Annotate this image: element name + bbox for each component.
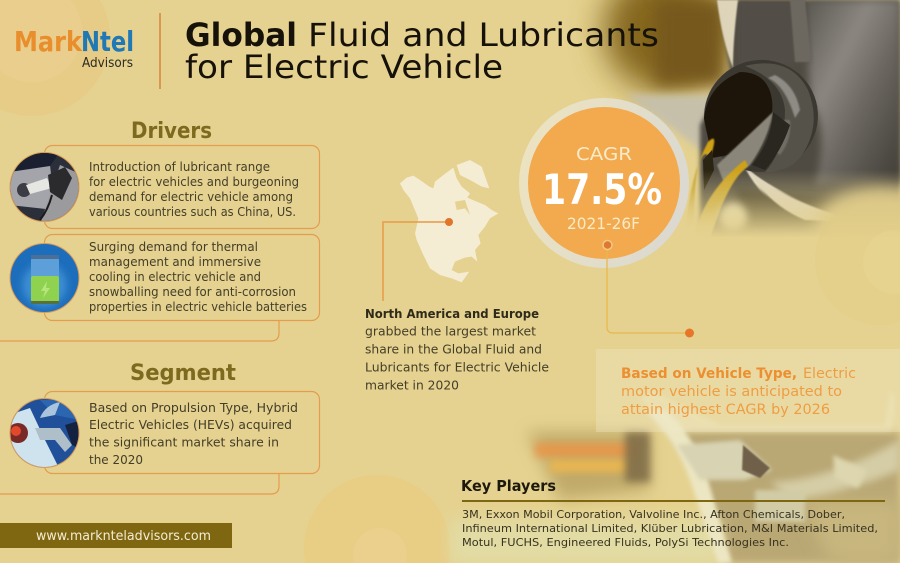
driver 2 text: properties in electric vehicle batteries <box>89 299 307 314</box>
driver 1 text: for electric vehicles and burgeoning <box>89 174 299 189</box>
key players: Key Players <box>461 477 556 495</box>
CAGR badge: CAGR <box>576 144 632 165</box>
website banner: www.marknteladvisors.com <box>36 529 211 544</box>
connector: CAGR to vehicle type callout <box>603 240 694 338</box>
connector: map to North America text <box>383 218 453 301</box>
oil streams <box>686 139 748 238</box>
callout: vehicle type text: attain highest CAGR by 2026 <box>621 402 830 418</box>
title: Fluid and Lubricants <box>308 16 659 54</box>
segment text: Based on Propulsion Type, Hybrid <box>89 401 298 416</box>
logo: Ntel <box>81 25 134 58</box>
North America text <box>365 307 549 394</box>
North America text: market in 2020 <box>365 378 459 394</box>
logo divider <box>159 13 161 89</box>
heading: Segment: Segment <box>130 361 236 386</box>
callout: vehicle type text <box>621 366 856 418</box>
CAGR badge <box>519 98 689 268</box>
callout: vehicle type text: motor vehicle is anticipated to <box>621 384 842 400</box>
logo: Advisors <box>82 55 133 71</box>
driver 1 text: demand for electric vehicle among <box>89 189 293 204</box>
icon: hybrid vehicle photo <box>8 398 82 470</box>
panel: vehicle type callout background <box>596 349 900 432</box>
website banner <box>0 523 232 548</box>
bottle mouth <box>704 60 818 180</box>
driver 1 text <box>89 159 299 219</box>
callout: vehicle type text: Electric <box>803 366 856 382</box>
key players: 3M, Exxon Mobil Corporation, Valvoline Inc., Afton Chemicals, Dober, <box>462 508 845 521</box>
key players <box>461 477 885 549</box>
heading: Drivers: Drivers <box>131 119 212 144</box>
title: for Electric Vehicle <box>185 48 503 86</box>
key players: Motul, FUCHS, Engineered Fluids, PolySi Technologies Inc. <box>462 536 789 549</box>
North America text: Lubricants for Electric Vehicle <box>365 360 549 376</box>
map: North America <box>400 160 498 282</box>
segment text: the 2020 <box>89 453 143 468</box>
North America text: share in the Global Fluid and <box>365 342 542 358</box>
CAGR badge: 17.5% <box>542 165 662 214</box>
segment text <box>89 401 298 468</box>
driver 2 text: cooling in electric vehicle and <box>89 269 261 284</box>
photo: blurred EV charger <box>450 410 900 563</box>
icon: battery <box>8 242 80 314</box>
photo: oil bottle pouring <box>603 0 900 263</box>
driver 2 text: management and immersive <box>89 254 261 269</box>
title <box>185 16 659 86</box>
callout: vehicle type text: Based on Vehicle Type, <box>621 366 797 382</box>
North America text: North America and Europe <box>365 307 539 322</box>
driver 1 text: Introduction of lubricant range <box>89 159 270 174</box>
key players: Infineum International Limited, Klüber Lubrication, M&I Materials Limited, <box>462 522 878 535</box>
title: Global <box>185 16 297 54</box>
driver 1 text: various countries such as China, US. <box>89 204 296 219</box>
segment text: the significant market share in <box>89 436 279 450</box>
panel: driver 2 <box>0 234 320 341</box>
North America text: grabbed the largest market <box>365 324 536 340</box>
driver 2 text <box>89 239 307 314</box>
driver 2 text: snowballing need for anti-corrosion <box>89 284 296 299</box>
segment text: Electric Vehicles (HEVs) acquired <box>89 418 292 433</box>
icon: EV charging photo <box>9 152 82 224</box>
faint photo band behind callout <box>640 390 895 432</box>
driver 2 text: Surging demand for thermal <box>89 239 258 254</box>
panel: segment <box>0 392 320 494</box>
panel: driver 1 <box>9 146 320 228</box>
logo <box>14 25 134 71</box>
CAGR badge: 2021-26F <box>567 214 640 233</box>
logo: Mark <box>14 25 83 58</box>
